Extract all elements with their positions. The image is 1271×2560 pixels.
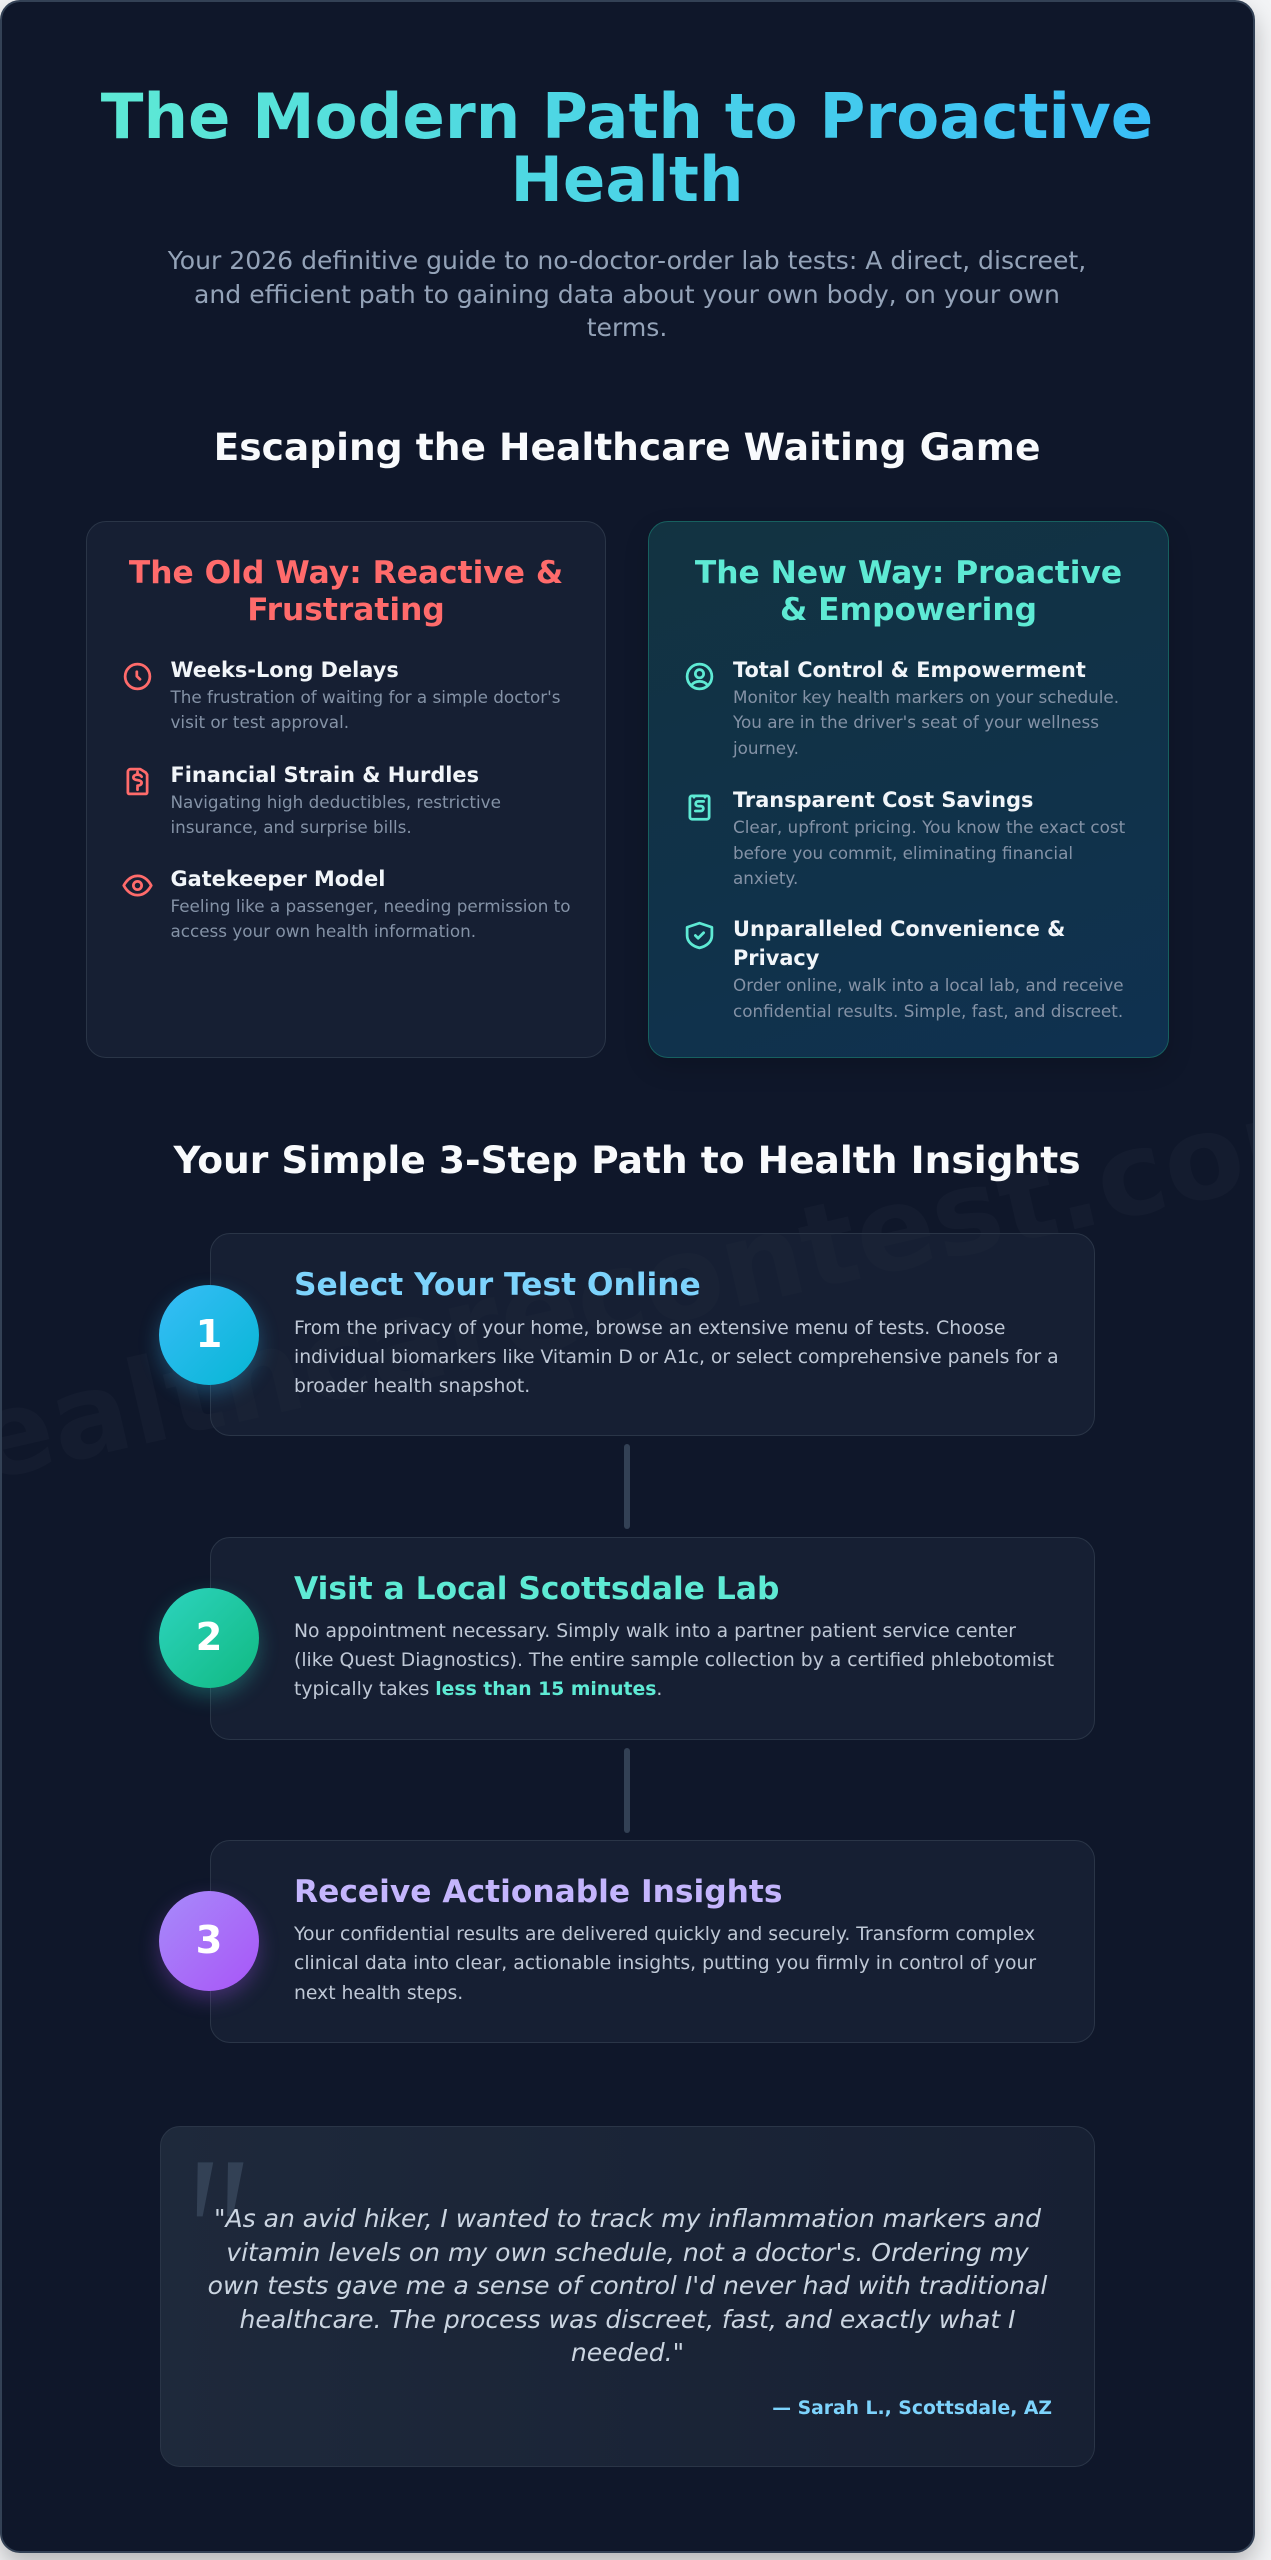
old way heading: Frustrating <box>247 592 445 628</box>
testimonial quote: "As an avid hiker, I wanted to track my inflammation markers and <box>214 2204 1041 2233</box>
old item: gatekeeper model: Feeling like a passenger, needing permission to <box>170 896 571 916</box>
new item: total control: Monitor key health markers on your schedule. <box>733 687 1119 707</box>
icon: eye <box>122 874 153 896</box>
old way heading: The Old Way: Reactive & <box>129 555 563 591</box>
new item: convenience and privacy <box>733 917 1124 1021</box>
old item: financial strain: Navigating high deductibles, restrictive <box>170 792 501 812</box>
old item: weeks-long delays: The frustration of waiting for a simple doctor's <box>170 687 561 707</box>
new item: total control: You are in the driver's seat of your wellness <box>733 712 1099 732</box>
old way heading <box>129 555 563 628</box>
testimonial quote: healthcare. The process was discreet, fast, and exactly what I <box>239 2304 1016 2334</box>
step 2 title: Visit a Local Scottsdale Lab <box>294 1570 779 1606</box>
step 2 text <box>294 1620 1054 1700</box>
step 3 number badge <box>159 1891 259 1991</box>
title <box>80 85 1174 211</box>
subtitle <box>168 246 1086 342</box>
step 1 number badge: 1 <box>196 1312 222 1357</box>
panel: step 1 <box>210 1233 1095 1436</box>
step 1 number badge <box>159 1285 259 1385</box>
new item: cost savings: Clear, upfront pricing. You know the exact cost <box>733 817 1125 837</box>
step 1 text <box>294 1318 1059 1397</box>
old item: financial strain: Financial Strain & Hurdles <box>170 762 479 786</box>
icon: document with dollar <box>126 768 148 796</box>
step 3 title: Receive Actionable Insights <box>294 1874 783 1910</box>
new item: cost savings <box>733 788 1125 888</box>
step 2 number badge: 2 <box>196 1615 222 1660</box>
new item: convenience and privacy: Unparalleled Convenience & <box>733 917 1065 941</box>
new way heading: The New Way: Proactive <box>695 555 1122 591</box>
heading: 3-step path: Your Simple 3-Step Path to Health Insights <box>173 1138 1081 1182</box>
step 2 number badge <box>159 1588 259 1688</box>
decorative quote mark: " <box>167 2108 259 2363</box>
step 3 text: Your confidential results are delivered quickly and securely. Transform complex <box>294 1924 1035 1945</box>
title: The Modern Path to Proactive <box>101 80 1153 153</box>
panel: testimonial <box>160 2126 1095 2467</box>
new item: total control: journey. <box>733 738 799 758</box>
panel: old way <box>86 521 606 1058</box>
step 1 text: From the privacy of your home, browse an extensive menu of tests. Choose <box>294 1318 1005 1338</box>
new way heading <box>695 555 1122 628</box>
testimonial quote <box>208 2204 1048 2367</box>
heading: escaping the waiting game: Escaping the Healthcare Waiting Game <box>214 425 1040 469</box>
new way heading: & Empowering <box>780 592 1037 628</box>
old item: gatekeeper model: access your own health information. <box>170 921 476 941</box>
testimonial author: — Sarah L., Scottsdale, AZ <box>772 2398 1052 2419</box>
old item: weeks-long delays <box>170 658 561 732</box>
panel: step 2 <box>210 1537 1095 1740</box>
old item: gatekeeper model <box>170 867 571 941</box>
new item: cost savings: before you commit, eliminating financial <box>733 843 1073 863</box>
old item: financial strain <box>170 762 501 837</box>
step 2 text: No appointment necessary. Simply walk into a partner patient service center <box>294 1620 1016 1642</box>
connector 2 <box>624 1748 630 1833</box>
new item: total control <box>732 658 1119 758</box>
step 3 text: clinical data into clear, actionable insights, putting you firmly in control of your <box>294 1953 1036 1974</box>
step 1 text: individual biomarkers like Vitamin D or A1c, or select comprehensive panels for a <box>294 1347 1059 1368</box>
step 3 number badge: 3 <box>196 1918 222 1963</box>
connector 1 <box>624 1444 630 1529</box>
icon: user circle <box>686 662 714 690</box>
icon: receipt dollar <box>688 794 710 821</box>
step 3 text <box>294 1924 1036 2004</box>
new item: convenience and privacy: Privacy <box>733 946 819 970</box>
testimonial quote: needed." <box>571 2338 684 2367</box>
title: Health <box>510 143 744 216</box>
subtitle: and efficient path to gaining data about your own body, on your own <box>194 280 1060 309</box>
icon: clock <box>124 662 152 690</box>
new item: cost savings: anxiety. <box>733 868 798 888</box>
old item: financial strain: insurance, and surprise bills. <box>170 817 412 837</box>
step 2 text: (like Quest Diagnostics). The entire sample collection by a certified phlebotomist <box>294 1650 1054 1671</box>
icon: shield check <box>686 922 714 950</box>
panel: step 3 <box>210 1840 1095 2043</box>
new item: convenience and privacy: Order online, walk into a local lab, and receive <box>733 975 1124 995</box>
step 1 title: Select Your Test Online <box>294 1267 701 1303</box>
subtitle: Your 2026 definitive guide to no-doctor-order lab tests: A direct, discreet, <box>168 246 1086 275</box>
new item: total control: Total Control & Empowerment <box>733 658 1086 682</box>
step 2 text: typically takes less than 15 minutes. <box>294 1679 662 1700</box>
old item: weeks-long delays: Weeks-Long Delays <box>170 658 399 682</box>
step 1 text: broader health snapshot. <box>294 1376 530 1397</box>
panel: new way <box>648 521 1169 1058</box>
new item: cost savings: Transparent Cost Savings <box>733 788 1033 812</box>
step 3 text: next health steps. <box>294 1983 463 2004</box>
old item: weeks-long delays: visit or test approval. <box>170 712 349 732</box>
subtitle: terms. <box>587 313 667 342</box>
testimonial quote: own tests gave me a sense of control I'd never had with traditional <box>208 2271 1047 2300</box>
testimonial quote: vitamin levels on my own schedule, not a doctor's. Ordering my <box>226 2238 1029 2266</box>
new item: convenience and privacy: confidential results. Simple, fast, and discreet. <box>733 1001 1123 1021</box>
old item: gatekeeper model: Gatekeeper Model <box>170 867 385 891</box>
